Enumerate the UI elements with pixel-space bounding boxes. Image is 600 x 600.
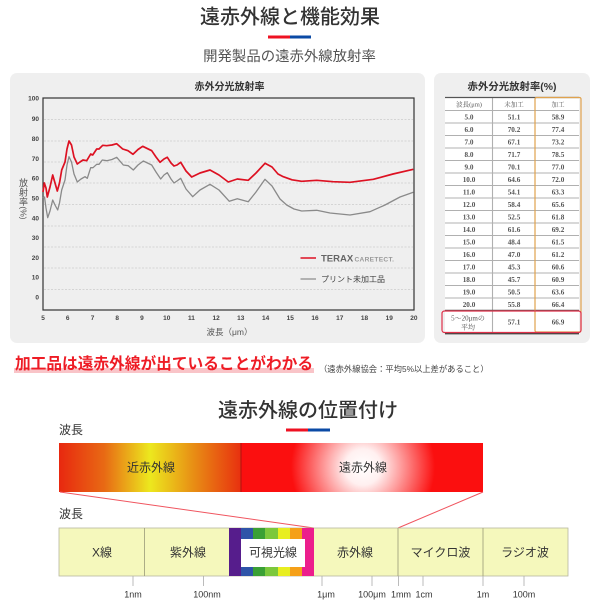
y axis labels bbox=[28, 96, 39, 302]
table rows: 45.3 bbox=[508, 264, 521, 272]
table rows: 7.0 bbox=[465, 138, 474, 146]
y axis labels: 90 bbox=[32, 116, 39, 123]
x axis labels: 12 bbox=[212, 315, 220, 322]
title underline bbox=[268, 36, 311, 38]
table rows: 17.0 bbox=[463, 264, 476, 272]
series: TERAX CARETECT bbox=[43, 141, 413, 197]
wavelength scale: 1nm bbox=[124, 590, 142, 600]
y axis title: 射 bbox=[19, 186, 28, 198]
wavelength scale bbox=[124, 576, 535, 600]
table rows: 72.0 bbox=[552, 176, 565, 184]
subtitle: 開発製品の遠赤外線放射率 bbox=[203, 48, 376, 65]
table rows: 47.0 bbox=[508, 251, 521, 259]
table rows: 51.1 bbox=[508, 114, 521, 122]
y axis title: 率 bbox=[19, 197, 28, 207]
x axis labels: 18 bbox=[361, 315, 368, 322]
table header: 未加工 bbox=[504, 100, 524, 108]
table header: 波長(μm) bbox=[456, 100, 482, 108]
table rows: 67.1 bbox=[508, 138, 521, 146]
series: unprocessed print bbox=[43, 157, 413, 218]
x axis labels: 13 bbox=[237, 315, 245, 322]
table average row bbox=[451, 314, 565, 332]
table rows: 63.3 bbox=[552, 188, 565, 196]
legend: プリント未加工品 bbox=[321, 274, 385, 284]
wavelength scale: 100m bbox=[513, 590, 535, 600]
table rows: 16.0 bbox=[463, 251, 476, 259]
x axis labels: 9 bbox=[140, 315, 144, 322]
table rows: 78.5 bbox=[552, 151, 565, 159]
wavelength scale: 1μm bbox=[317, 590, 335, 600]
x axis labels: 6 bbox=[66, 315, 70, 322]
wavelength scale: 100μm bbox=[358, 590, 386, 600]
table rows: 65.6 bbox=[552, 201, 565, 209]
table average row: 66.9 bbox=[552, 318, 565, 326]
table rows: 73.2 bbox=[552, 138, 565, 146]
table rows bbox=[463, 114, 565, 309]
x axis labels: 19 bbox=[386, 315, 393, 322]
panel: emissivity table bbox=[434, 73, 590, 343]
footnote: （遠赤外線協会：平均5%以上差があること） bbox=[319, 364, 489, 374]
x axis labels: 20 bbox=[410, 315, 418, 322]
table rows: 63.6 bbox=[552, 288, 565, 296]
far infrared band: 遠赤外線 bbox=[339, 460, 387, 474]
table average row: 57.1 bbox=[508, 318, 521, 326]
label: wavelength lower: 波長 bbox=[59, 507, 83, 521]
table average row: 平均 bbox=[461, 322, 475, 332]
table rows: 54.1 bbox=[508, 188, 521, 196]
wavelength scale: 1cm bbox=[415, 590, 433, 600]
table rows: 10.0 bbox=[463, 176, 476, 184]
y axis title bbox=[18, 177, 28, 220]
table rows: 15.0 bbox=[463, 238, 476, 246]
title: far infrared and functional effect: 遠赤外線と機能効果 bbox=[200, 6, 380, 28]
y axis labels: 100 bbox=[28, 96, 39, 102]
panel: emissivity chart bbox=[10, 73, 425, 343]
heading underline bbox=[286, 428, 330, 432]
highlight: average row bbox=[442, 311, 581, 332]
table rows: 64.6 bbox=[508, 176, 521, 184]
highlight: processed column bbox=[535, 98, 581, 332]
callout: red highlighted conclusion: 加工品は遠赤外線が出ていることがわかる bbox=[15, 354, 313, 373]
table rows: 77.0 bbox=[552, 164, 565, 172]
table rows: 19.0 bbox=[463, 288, 476, 296]
table rows: 8.0 bbox=[465, 151, 474, 159]
table rows: 61.5 bbox=[552, 238, 565, 246]
table rows: 6.0 bbox=[465, 126, 474, 134]
x axis title: 波長（μm） bbox=[207, 327, 252, 337]
table rows: 5.0 bbox=[465, 114, 474, 122]
x axis labels: 7 bbox=[91, 315, 95, 322]
x axis labels: 16 bbox=[311, 315, 319, 322]
label: wavelength upper: 波長 bbox=[59, 423, 83, 437]
spectrum: microwave: マイクロ波 bbox=[411, 546, 470, 560]
table rows: 11.0 bbox=[463, 188, 475, 196]
near infrared band bbox=[59, 443, 241, 492]
table title: 赤外分光放射率(%) bbox=[468, 80, 556, 93]
table rows: 13.0 bbox=[463, 214, 476, 222]
x axis labels: 10 bbox=[163, 315, 171, 322]
table rows: 69.2 bbox=[552, 226, 565, 234]
y axis labels: 60 bbox=[32, 176, 39, 182]
heading: position of far infrared: 遠赤外線の位置付け bbox=[218, 399, 398, 422]
spectrum: ultraviolet: 紫外線 bbox=[170, 544, 206, 560]
far infrared band bbox=[241, 443, 483, 492]
table rows: 58.9 bbox=[552, 114, 565, 122]
table bbox=[442, 98, 581, 334]
table rows: 58.4 bbox=[508, 201, 521, 209]
connector lines bbox=[60, 492, 483, 528]
table rows: 61.6 bbox=[508, 226, 521, 234]
table rows: 20.0 bbox=[463, 301, 476, 309]
band: near and far infrared bbox=[59, 443, 483, 492]
table rows: 52.5 bbox=[508, 214, 521, 222]
table rows: 18.0 bbox=[463, 276, 476, 284]
x axis labels: 15 bbox=[287, 315, 294, 322]
table rows: 55.8 bbox=[508, 301, 521, 309]
table average row: 5〜20μmの bbox=[451, 314, 485, 322]
x axis labels: 11 bbox=[188, 315, 195, 322]
table rows: 60.9 bbox=[552, 276, 565, 284]
table header bbox=[456, 100, 565, 108]
spectrum: radio: ラジオ波 bbox=[501, 546, 549, 560]
table rows: 50.5 bbox=[508, 288, 521, 296]
table rows: 9.0 bbox=[465, 164, 474, 172]
legend: CARETECT. bbox=[354, 256, 394, 264]
table rows: 12.0 bbox=[463, 201, 476, 209]
spectrum: visible light: 可視光線 bbox=[249, 544, 297, 560]
y axis labels: 40 bbox=[32, 216, 39, 222]
y axis labels: 50 bbox=[32, 196, 39, 202]
table rows: 70.2 bbox=[508, 126, 521, 134]
x axis labels: 8 bbox=[115, 315, 119, 322]
wavelength scale: 100nm bbox=[193, 590, 221, 600]
table header: 加工 bbox=[552, 100, 565, 108]
table rows: 71.7 bbox=[508, 151, 521, 159]
table rows: 77.4 bbox=[552, 126, 565, 134]
y axis labels: 20 bbox=[32, 255, 39, 262]
x axis labels: 17 bbox=[336, 315, 344, 322]
y axis labels: 70 bbox=[32, 156, 39, 163]
table rows: 61.2 bbox=[552, 251, 565, 259]
x axis labels: 14 bbox=[262, 315, 270, 322]
y axis title: 放 bbox=[19, 177, 28, 188]
spectrum: infrared: 赤外線 bbox=[337, 544, 373, 560]
near infrared band: 近赤外線 bbox=[127, 460, 175, 474]
spectrum: visible light bbox=[229, 528, 314, 576]
table rows: 45.7 bbox=[508, 276, 521, 284]
spectrum: x-ray: X線 bbox=[92, 544, 112, 560]
table rows: 48.4 bbox=[508, 238, 521, 246]
y axis labels: 10 bbox=[32, 274, 39, 282]
y axis title: (%) bbox=[18, 206, 28, 220]
legend: TERAX bbox=[321, 254, 354, 264]
table rows: 66.4 bbox=[552, 301, 565, 309]
wavelength scale: 1m bbox=[477, 590, 489, 600]
spectrum band bbox=[59, 528, 568, 576]
wavelength scale: 1mm bbox=[391, 590, 411, 600]
line chart bbox=[18, 96, 418, 337]
table rows: 14.0 bbox=[463, 226, 476, 234]
table rows: 60.6 bbox=[552, 264, 565, 272]
chart title: 赤外分光放射率 bbox=[194, 80, 264, 93]
table rows: 61.8 bbox=[552, 214, 565, 222]
table rows: 70.1 bbox=[508, 164, 521, 172]
y axis labels: 80 bbox=[32, 136, 39, 143]
legend bbox=[300, 254, 394, 284]
x axis labels bbox=[41, 315, 418, 322]
x axis labels: 5 bbox=[41, 315, 45, 322]
y axis labels: 30 bbox=[32, 235, 39, 242]
y axis labels: 0 bbox=[35, 294, 39, 302]
